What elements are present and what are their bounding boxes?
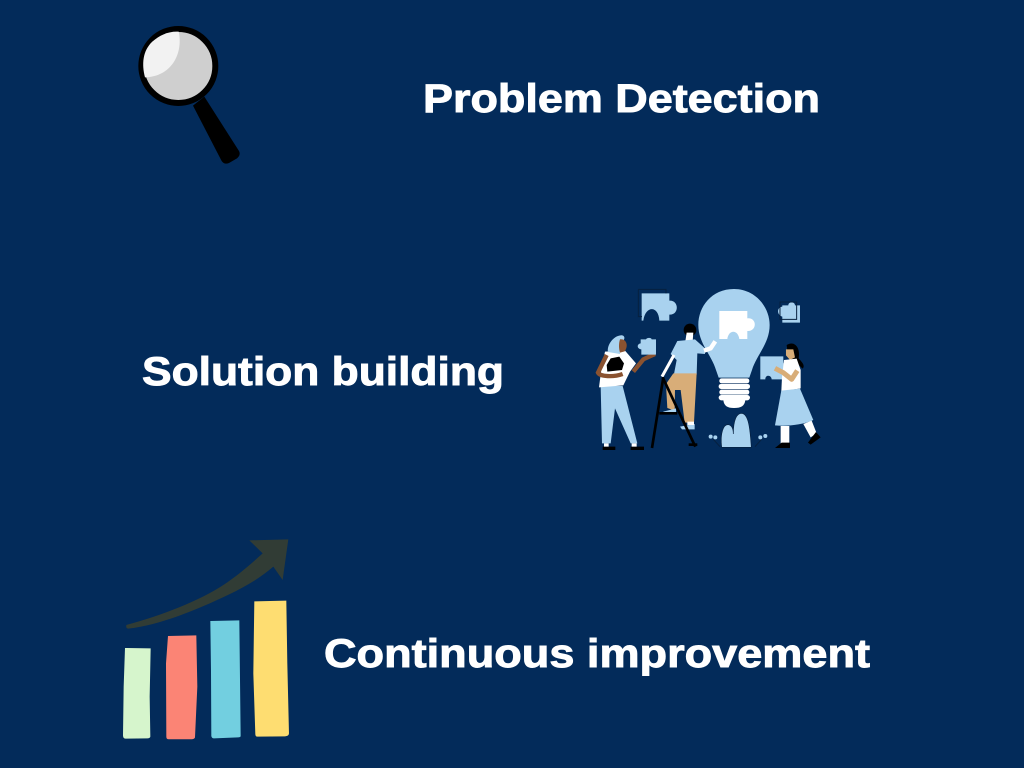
light bulb — [698, 289, 770, 408]
magnifier lens — [141, 29, 215, 103]
bar 1 — [123, 648, 151, 739]
magnifier handle — [193, 97, 240, 164]
puzzle piece top left — [638, 289, 677, 321]
heading: Problem Detection: Problem Detection — [423, 77, 820, 121]
plant with leaves — [709, 413, 767, 447]
ladder — [652, 377, 697, 448]
illustration: team building a light bulb from puzzle pieces — [598, 289, 821, 450]
bar 3 — [210, 620, 241, 738]
person left with headscarf — [598, 335, 656, 450]
bar 2 — [166, 635, 197, 739]
lens highlight — [143, 32, 180, 77]
puzzle piece top right — [778, 302, 800, 323]
heading: Continuous improvement: Continuous improvement — [324, 632, 870, 676]
person on ladder — [662, 324, 715, 429]
person right holding puzzle piece — [760, 343, 821, 448]
heading: Solution building: Solution building — [142, 350, 504, 394]
bar chart with growth arrow — [123, 539, 289, 739]
icon: magnifying glass — [141, 29, 240, 164]
growth arrow — [126, 539, 288, 629]
bar 4 — [253, 601, 289, 737]
